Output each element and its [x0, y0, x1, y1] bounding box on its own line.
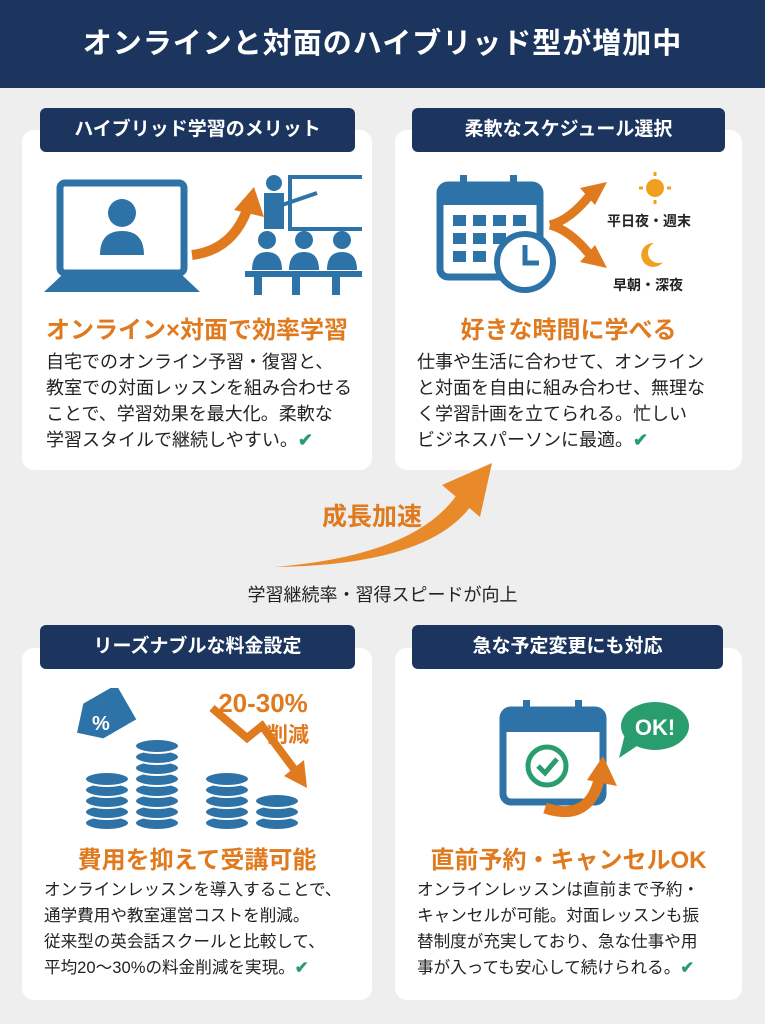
caption: continuation rate: 学習継続率・習得スピードが向上	[248, 585, 518, 605]
tab: reasonable price	[40, 625, 355, 669]
heading: オンライン×対面で効率学習	[46, 317, 348, 344]
illustration: calendar check OK	[500, 700, 689, 818]
title	[0, 0, 765, 88]
illustration: coins and down arrow	[77, 688, 307, 829]
illustration: laptop to classroom	[44, 175, 362, 295]
label: 20-30% reduction: 20-30%	[218, 688, 308, 718]
label: weekday night: 平日夜・週末	[607, 213, 691, 229]
heading: 好きな時間に学べる	[460, 317, 676, 344]
body text: 自宅でのオンライン予習・復習と、	[46, 352, 333, 372]
illustration: calendar check OK: OK!	[635, 715, 675, 740]
body text: オンラインレッスンは直前まで予約・	[417, 880, 699, 899]
heading: 直前予約・キャンセルOK	[430, 847, 706, 874]
tab: flexible schedule	[412, 108, 725, 152]
illustration: calendar clock	[436, 172, 671, 293]
body text: 仕事や生活に合わせて、オンライン	[417, 352, 704, 372]
title: オンラインと対面のハイブリッド型が増加中	[83, 28, 682, 60]
panel: flexible schedule	[395, 130, 742, 470]
label: 20-30% reduction: 削減	[267, 724, 309, 747]
body text: オンラインレッスンを導入することで、	[44, 880, 342, 899]
body text: 平均20～30%の料金削減を実現。✔	[44, 958, 309, 977]
arrow: growth	[276, 463, 492, 567]
body text: 学習スタイルで継続しやすい。✔	[46, 430, 313, 450]
body text: キャンセルが可能。対面レッスンも振	[417, 906, 699, 925]
body text: 教室での対面レッスンを組み合わせる	[46, 378, 352, 398]
tab: hybrid merits	[40, 108, 355, 152]
panel: reasonable price	[22, 648, 372, 1000]
heading: 費用を抑えて受講可能	[78, 847, 316, 874]
tab: hybrid merits: ハイブリッド学習のメリット	[74, 119, 321, 140]
body text: ことで、学習効果を最大化。柔軟な	[46, 404, 333, 424]
tab: reasonable price: リーズナブルな料金設定	[93, 636, 302, 657]
body text: 事が入っても安心して続けられる。✔	[417, 958, 694, 977]
body text: 替制度が充実しており、急な仕事や用	[417, 932, 697, 951]
label: early morning: 早朝・深夜	[613, 277, 683, 293]
body text: 従来型の英会話スクールと比較して、	[44, 932, 325, 951]
tab: schedule changes: 急な予定変更にも対応	[472, 636, 662, 657]
panel: schedule changes	[395, 648, 742, 1000]
tab: schedule changes	[412, 625, 723, 669]
body text	[46, 352, 352, 450]
body text: ビジネスパーソンに最適。✔	[417, 430, 648, 450]
label: 20-30% reduction	[218, 688, 309, 747]
body text: と対面を自由に組み合わせ、無理な	[417, 378, 705, 398]
label: growth acceleration: 成長加速	[322, 503, 422, 531]
illustration: coins and down arrow: %	[92, 713, 110, 735]
body text: 通学費用や教室運営コストを削減。	[44, 906, 310, 925]
tab: flexible schedule: 柔軟なスケジュール選択	[465, 119, 672, 140]
panel: hybrid merits	[22, 130, 372, 470]
body text: く学習計画を立てられる。忙しい	[417, 404, 687, 424]
body text	[417, 880, 699, 977]
body text	[44, 880, 342, 977]
body text	[417, 352, 705, 450]
